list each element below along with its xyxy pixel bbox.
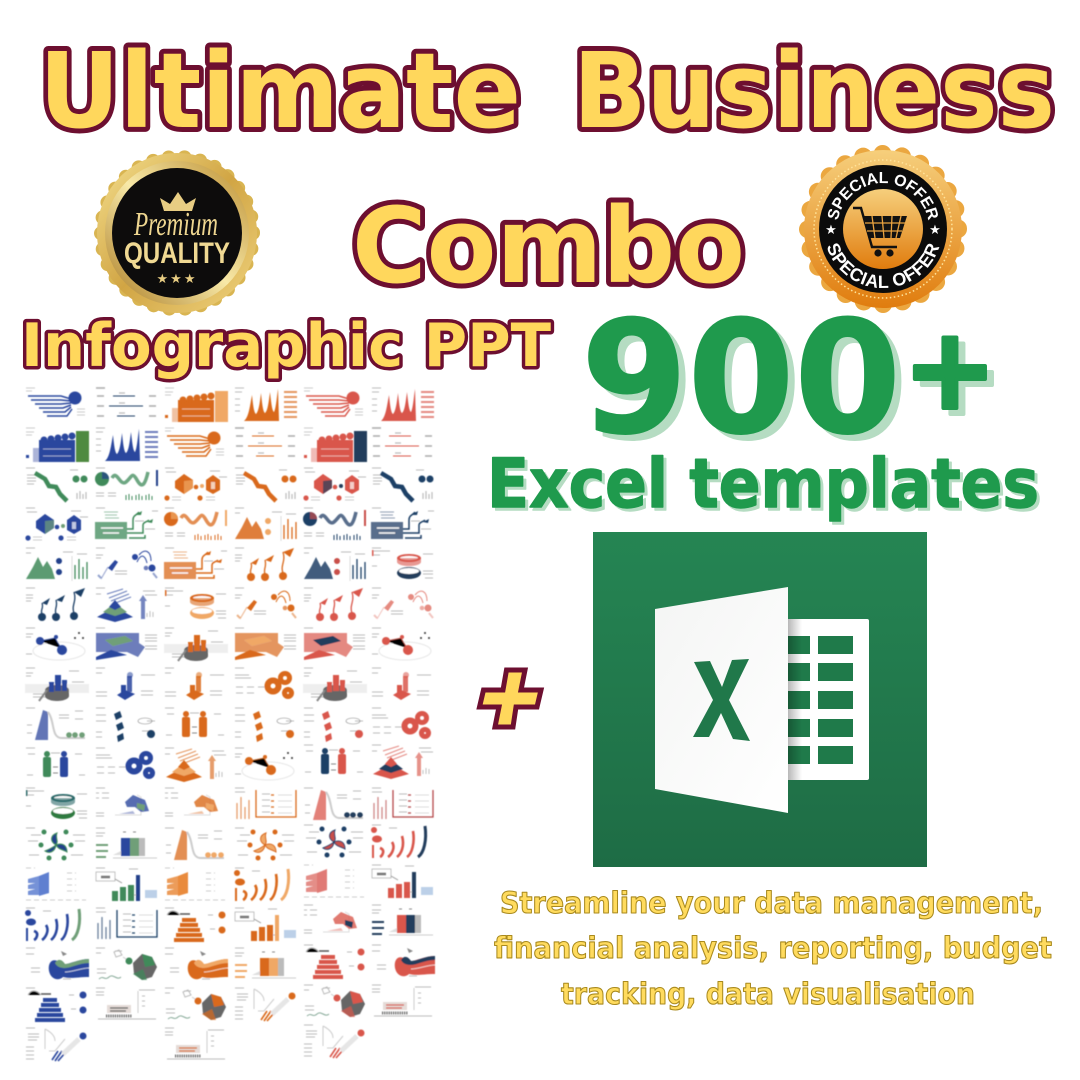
Excel sheet: [780, 619, 869, 780]
row 17: [26, 1025, 364, 1061]
caption text: tracking, data visualisation: [561, 977, 975, 1011]
Excel cover page: [655, 587, 788, 813]
title: Ultimate Business: Ultimate: [39, 30, 521, 152]
headline: 900+: 900: [581, 287, 901, 469]
row 2: [26, 428, 432, 462]
row 9: [26, 708, 428, 742]
row 11: [26, 788, 433, 820]
badge: premium quality: [97, 153, 257, 313]
title: Ultimate Business: Business: [573, 30, 1055, 152]
icon: Excel logo: [593, 532, 927, 867]
icon: left star: ★: [825, 223, 837, 238]
text: bottom arc: SPECIAL OFFER: [828, 243, 940, 288]
text: Premium: Premium: [133, 206, 218, 243]
headline: Excel templates: Excel templates: [487, 445, 1039, 524]
row 8: [25, 668, 431, 701]
headline: 900+: +: [910, 311, 1004, 441]
row 6: [26, 588, 433, 622]
row 5: [26, 548, 433, 581]
row 12: [26, 825, 426, 860]
row 1: [26, 388, 434, 422]
heading: Infographic PPT: Infographic PPT: [21, 311, 551, 381]
row 7: [26, 628, 431, 661]
headline: 900+: 900: [588, 293, 908, 475]
caption text: Streamline your data management,: [500, 886, 1043, 920]
text: top arc: SPECIAL OFFER: [828, 172, 938, 220]
title: Ultimate Business: [39, 30, 1055, 152]
icon: three stars: ★★★: [157, 272, 197, 287]
row 14: [25, 905, 433, 942]
thumbnail grid of infographic slides: [25, 388, 435, 1061]
Excel letter X: [693, 659, 750, 741]
icon: plus sign: [480, 670, 541, 727]
text: QUALITY: QUALITY: [124, 237, 230, 270]
row 16: [26, 985, 432, 1022]
row 13: [26, 865, 433, 901]
badge: special offer: [799, 145, 967, 313]
row 3: [26, 468, 434, 501]
row 15: [26, 945, 435, 980]
row 4: [25, 508, 434, 541]
icon: shopping cart: [853, 208, 907, 257]
icon: crown: [160, 192, 196, 211]
icon: right star: ★: [929, 223, 941, 238]
subtitle: Combo: Combo: [352, 185, 745, 307]
caption text: financial analysis, reporting, budget: [494, 931, 1052, 965]
caption text: [494, 886, 1052, 1011]
row 10: [26, 745, 433, 782]
headline: 900+: +: [903, 305, 997, 435]
